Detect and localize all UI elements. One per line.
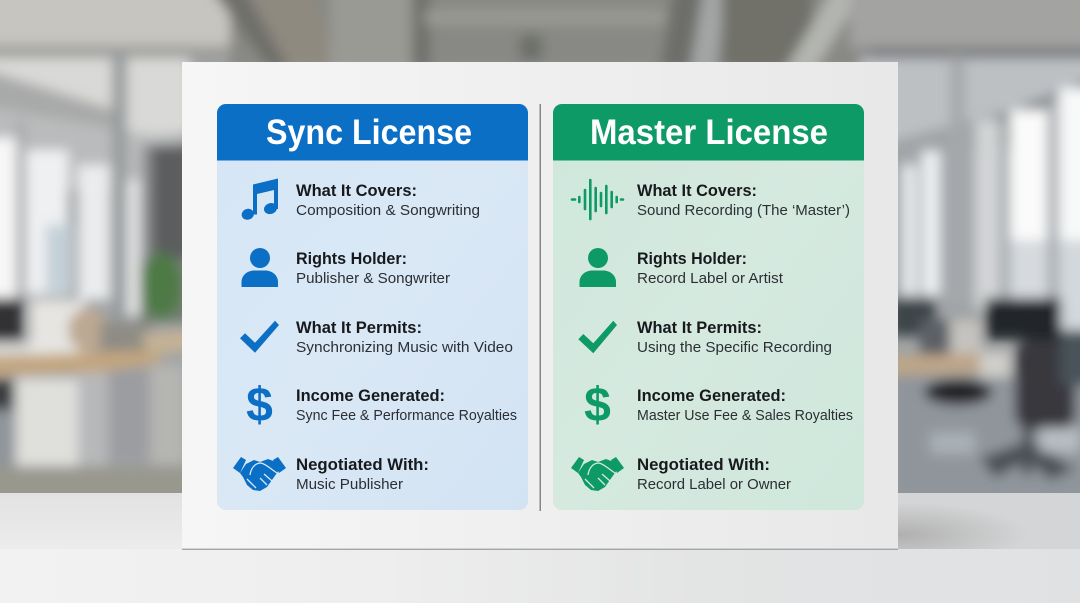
row: rights holder: Rights Holder: — [637, 250, 747, 268]
icon: dollar sign: $ — [246, 379, 273, 432]
icon: handshake — [571, 457, 624, 491]
icon: sound wave — [572, 180, 623, 219]
panel: sync license — [217, 104, 528, 510]
icon: handshake — [233, 457, 286, 491]
icon: music note — [240, 178, 278, 221]
row: negotiated with: Negotiated With: — [637, 456, 770, 474]
row: what it permits — [296, 319, 513, 356]
row: rights holder: Record Label or Artist — [637, 270, 784, 287]
row: income generated: Sync Fee & Performance Royalties — [296, 407, 517, 424]
master title: Master License — [590, 113, 828, 152]
row: what it covers: Composition & Songwriting — [296, 202, 480, 219]
master header — [553, 104, 864, 160]
icon: person — [580, 248, 616, 287]
row: what it permits: What It Permits: — [296, 319, 422, 337]
row: what it permits: Synchronizing Music with Video — [296, 339, 513, 356]
row: income generated: Income Generated: — [637, 387, 786, 405]
right side — [850, 0, 1080, 48]
master panel body — [553, 104, 864, 510]
row: income generated: Master Use Fee & Sales Royalties — [637, 407, 853, 424]
sync title: Sync License — [266, 113, 472, 152]
row: what it permits: What It Permits: — [637, 319, 762, 337]
row: what it permits: Using the Specific Recording — [637, 339, 832, 356]
row: income generated — [296, 387, 517, 424]
row: rights holder: Publisher & Songwriter — [296, 270, 450, 287]
row: negotiated with — [296, 456, 429, 493]
row: income generated: Income Generated: — [296, 387, 445, 405]
row: what it covers — [296, 182, 480, 219]
icon: check mark — [240, 321, 279, 353]
row: what it covers — [637, 182, 850, 219]
white card — [182, 62, 898, 550]
row: what it covers: What It Covers: — [637, 182, 757, 200]
icon: check mark — [578, 321, 617, 353]
row: negotiated with — [637, 456, 791, 493]
sync panel body — [217, 104, 528, 510]
icon: dollar sign: $ — [584, 379, 611, 432]
row: negotiated with: Record Label or Owner — [637, 476, 791, 493]
row: income generated — [637, 387, 853, 424]
row: what it covers: What It Covers: — [296, 182, 417, 200]
row: what it permits — [637, 319, 832, 356]
row: negotiated with: Negotiated With: — [296, 456, 429, 474]
row: what it covers: Sound Recording (The ‘Master’) — [637, 202, 850, 219]
row: rights holder: Rights Holder: — [296, 250, 407, 268]
table surface — [0, 493, 1080, 603]
sync header — [217, 104, 528, 160]
row: rights holder — [296, 250, 450, 287]
row: rights holder — [637, 250, 784, 287]
row: negotiated with: Music Publisher — [296, 476, 403, 493]
panel: master license — [553, 104, 864, 510]
top strip — [230, 0, 870, 70]
icon: person — [242, 248, 278, 287]
